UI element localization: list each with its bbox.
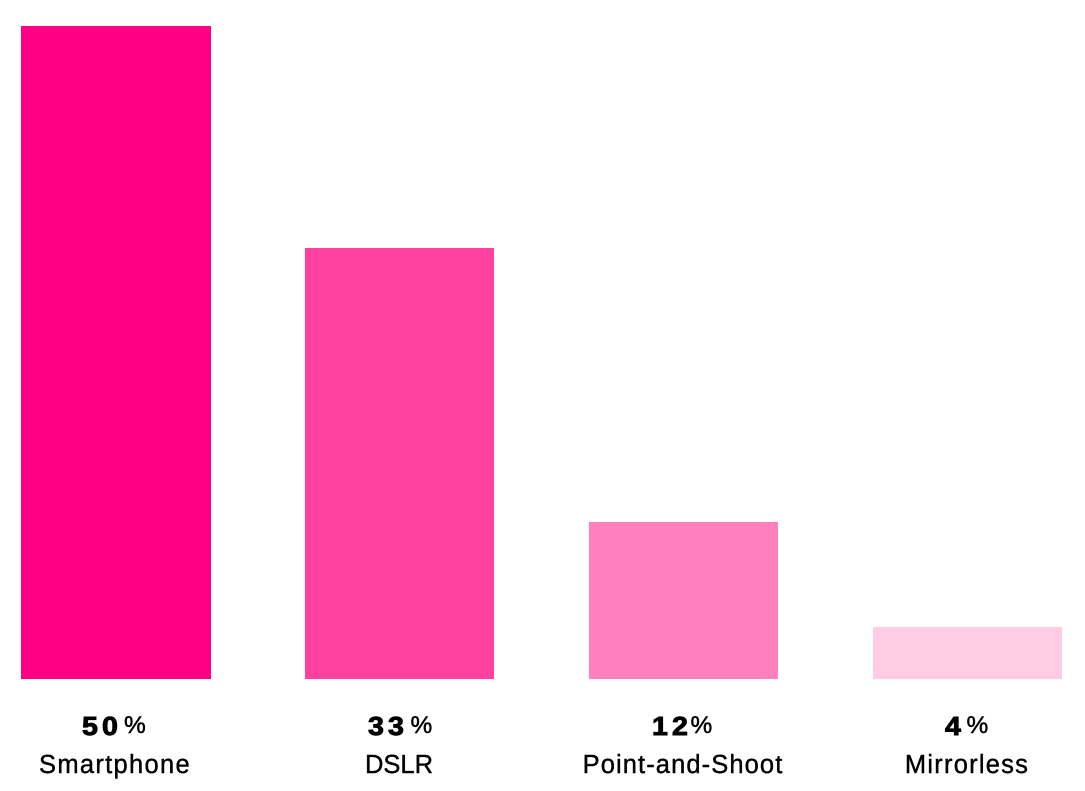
label: Mirrorless — [905, 711, 1029, 779]
label: Mirrorless: Mirrorless — [905, 751, 1029, 779]
label: Smartphone: Smartphone — [39, 751, 191, 779]
bar: Smartphone — [21, 26, 211, 679]
label: DSLR: DSLR — [365, 751, 433, 779]
label: Point-and-Shoot: Point-and-Shoot — [583, 751, 783, 779]
bar: Mirrorless — [873, 627, 1062, 679]
label: Smartphone: 50 — [82, 711, 122, 741]
label: Smartphone: % — [124, 712, 146, 739]
label: DSLR: 33 — [368, 711, 407, 741]
label: DSLR: % — [410, 712, 432, 739]
label: Mirrorless: 4 — [945, 711, 965, 741]
label: Point-and-Shoot: 12 — [652, 711, 692, 741]
label: Point-and-Shoot: % — [690, 712, 712, 739]
label: Point-and-Shoot — [583, 711, 783, 779]
label: Mirrorless: % — [966, 712, 988, 739]
label: Smartphone — [39, 711, 191, 779]
bar: DSLR — [305, 248, 494, 679]
label: DSLR — [365, 711, 433, 779]
bar: Point-and-Shoot — [589, 522, 778, 679]
